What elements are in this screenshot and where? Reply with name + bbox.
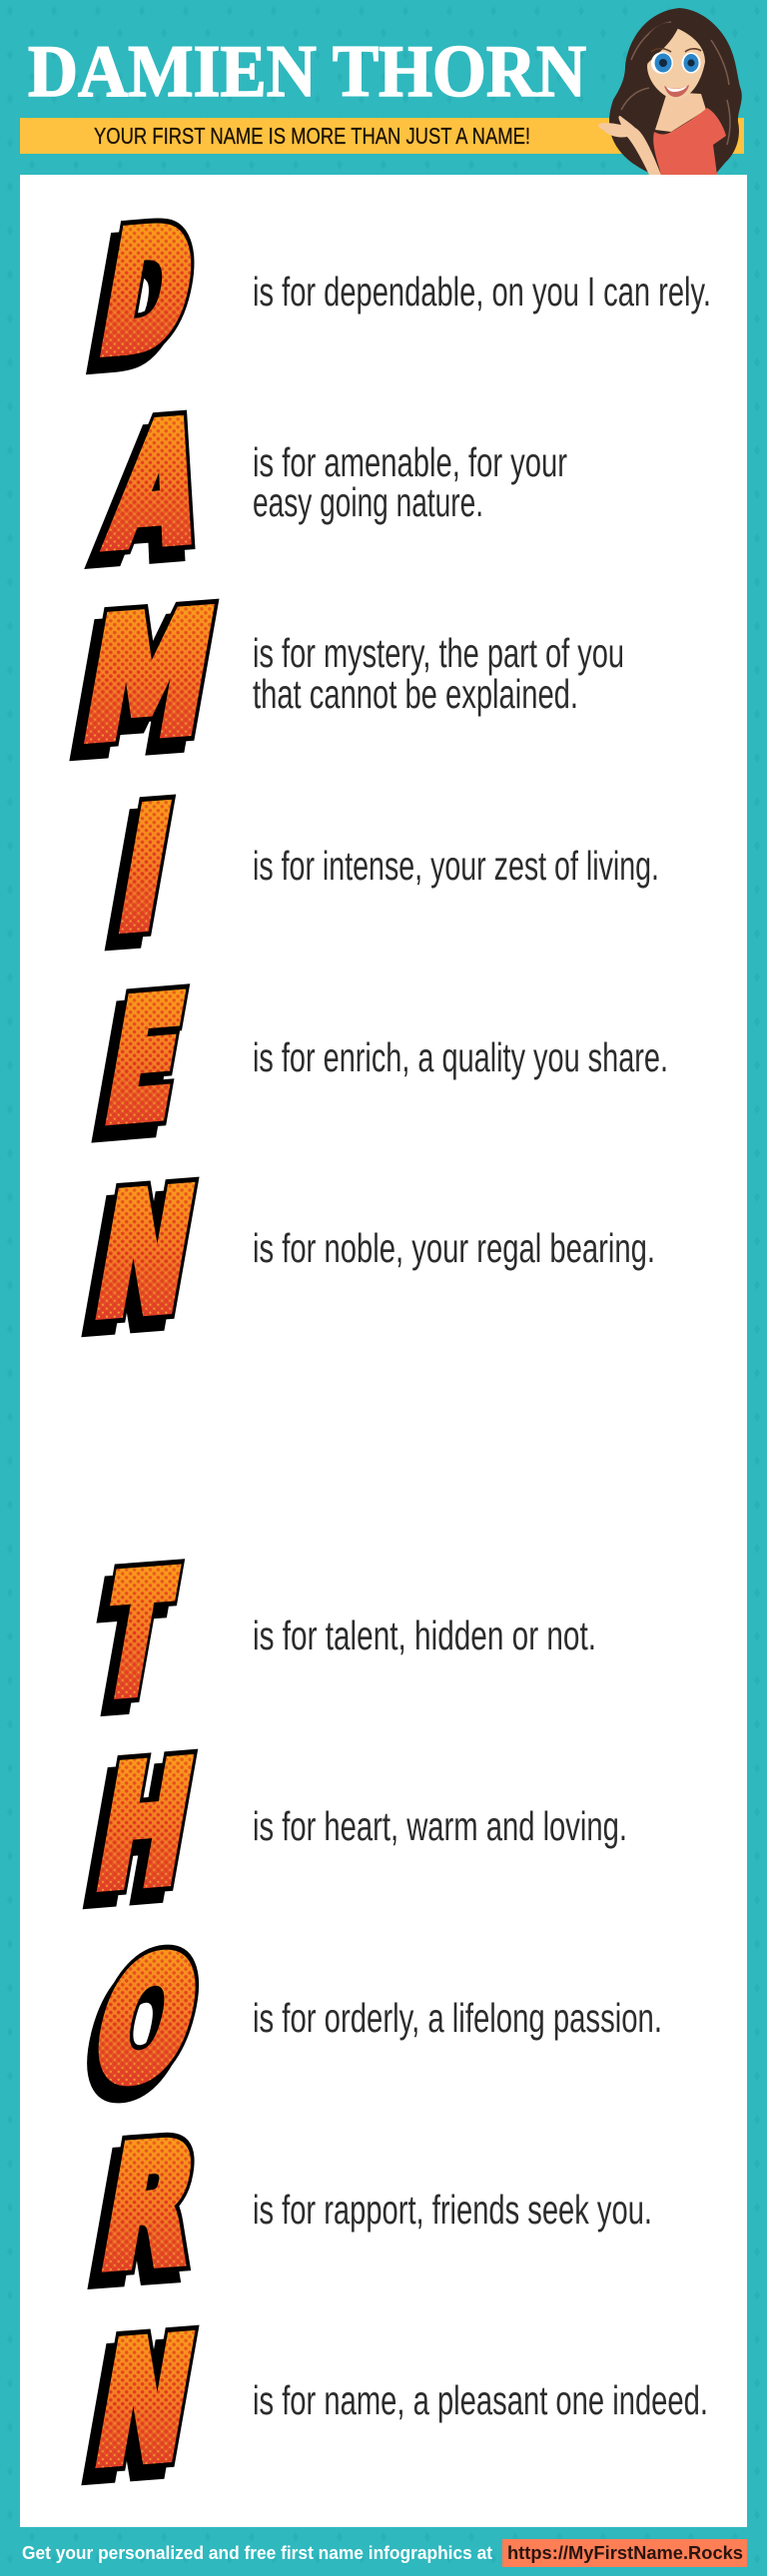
letter E: E (95, 963, 195, 1157)
letter O: O (78, 1924, 214, 2120)
face (647, 28, 705, 100)
arm and hand (598, 116, 661, 175)
icon: cartoon woman (598, 8, 742, 175)
letter R: R (91, 2111, 209, 2304)
banner text: YOUR FIRST NAME IS MORE THAN JUST A NAME! (94, 123, 530, 149)
eyes (651, 49, 701, 74)
row: M (69, 599, 623, 761)
text: is for mystery, the part of you (253, 630, 624, 676)
row: N (81, 2324, 705, 2486)
letter T: T (91, 1539, 183, 1731)
row: D (86, 218, 709, 375)
footer link: https://MyFirstName.Rocks (507, 2543, 743, 2563)
letter O: O (70, 1936, 206, 2132)
letter I: I (108, 775, 182, 966)
text: is for amenable, for your (253, 439, 567, 485)
neck and chest (655, 92, 706, 132)
letter N: N (75, 2317, 195, 2512)
hair parting (647, 23, 711, 64)
row: O (87, 1945, 659, 2103)
row: A (84, 409, 567, 569)
mouth (664, 85, 689, 97)
title: DAMIEN THORN (28, 31, 586, 113)
letter I: I (98, 787, 172, 977)
letter H: H (76, 1741, 194, 1937)
row: E (91, 983, 665, 1143)
footer (22, 2539, 747, 2567)
row: I (104, 795, 657, 951)
letter D: D (89, 195, 206, 390)
row: N (81, 1176, 653, 1338)
letter N: N (75, 1169, 195, 1364)
shirt (653, 108, 726, 175)
banner (20, 118, 744, 154)
letter N: N (85, 1157, 205, 1352)
letter D: D (79, 207, 196, 402)
letter N: N (85, 2305, 205, 2500)
footer link box (502, 2539, 747, 2567)
text: is for heart, warm and loving. (253, 1803, 627, 1849)
row: M: that cannot be explained. (253, 671, 578, 717)
letter R: R (81, 2123, 199, 2316)
row: A: easy going nature. (253, 479, 483, 525)
letter A: A (90, 400, 204, 595)
letter M: M (73, 578, 225, 776)
letter H: H (86, 1729, 204, 1925)
letter A: A (100, 388, 214, 583)
letter O (87, 1945, 200, 2103)
letter M: M (63, 590, 215, 788)
letter E: E (85, 974, 185, 1169)
letter T: T (81, 1551, 173, 1743)
row: H (82, 1749, 625, 1909)
text: is for talent, hidden or not. (253, 1612, 596, 1658)
footer text: Get your personalized and free first name infographics at (22, 2543, 492, 2563)
row: R (88, 2133, 649, 2289)
row: T (96, 1559, 593, 1717)
